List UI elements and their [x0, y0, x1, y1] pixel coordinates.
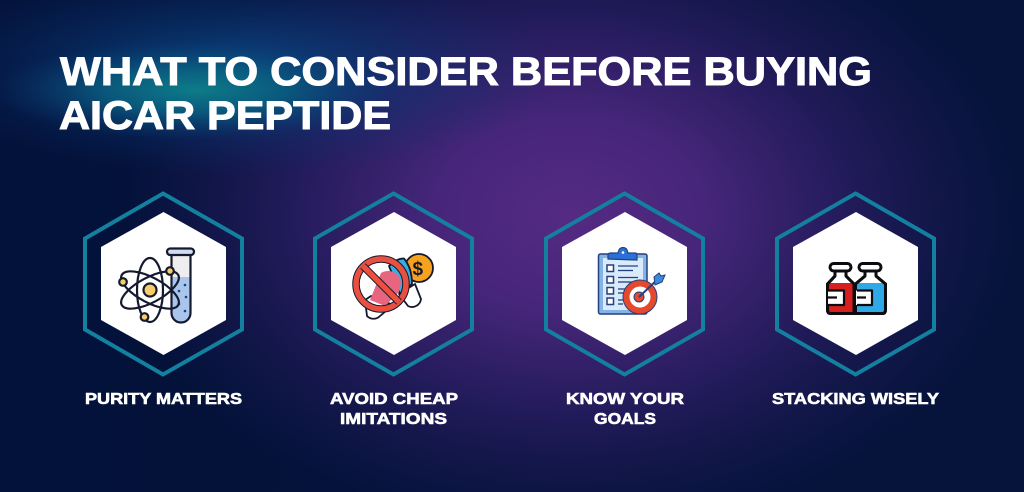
- title: AICAR PEPTIDE: [59, 94, 391, 138]
- label: [330, 391, 458, 428]
- hexagon frame: [85, 194, 242, 374]
- icon: crossed out pills and coin: [356, 254, 433, 319]
- panel: avoid cheap imitations: [315, 194, 472, 428]
- icon: clipboard and target: [598, 248, 665, 314]
- panel: stacking wisely: [772, 194, 939, 408]
- label: IMITATIONS: [340, 411, 447, 428]
- hexagon frame: [777, 194, 934, 374]
- title: [59, 50, 872, 138]
- icon: crossed out pills and coin: $: [412, 259, 424, 280]
- panel: purity matters: [85, 194, 242, 408]
- label: GOALS: [594, 411, 656, 428]
- icon: atom and test tube: [116, 248, 194, 322]
- label: AVOID CHEAP: [330, 391, 458, 408]
- title: WHAT TO CONSIDER BEFORE BUYING: [60, 50, 872, 94]
- hexagon frame: [315, 194, 472, 374]
- label: PURITY MATTERS: [85, 391, 242, 408]
- panel: know your goals: [546, 194, 703, 428]
- hexagon frame: [546, 194, 703, 374]
- label: STACKING WISELY: [772, 391, 939, 408]
- label: [566, 391, 685, 428]
- icon: two vials: [828, 264, 886, 314]
- label: KNOW YOUR: [566, 391, 685, 408]
